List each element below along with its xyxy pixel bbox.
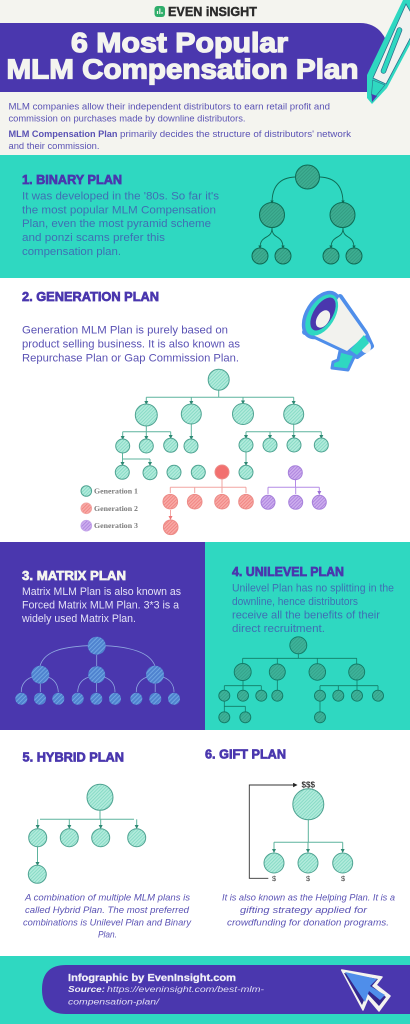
heading: generation plan: 2. GENERATION PLAN <box>22 289 159 304</box>
title: 6 Most Popular <box>71 27 288 58</box>
heading: unilevel plan: 4. UNILEVEL PLAN <box>232 564 344 579</box>
intro text: MLM companies allow their independent distributors to earn retail profit and <box>8 102 330 112</box>
text: hybrid plan description: combinations is Unilevel Plan and Binary <box>23 918 192 928</box>
footer text: compensation-plan/ <box>68 997 161 1007</box>
intro text: primarily decides the structure of distributors' network <box>120 129 352 139</box>
intro text <box>8 102 352 151</box>
text: binary plan description: It was developed in the '80s. So far it's <box>22 190 220 202</box>
panel: hybrid plan <box>22 750 192 940</box>
legend: generations <box>81 486 139 531</box>
text: binary plan description <box>22 190 220 258</box>
text: unilevel plan description: Unilevel Plan has no splitting in the <box>232 583 394 595</box>
panel: gift plan <box>205 747 395 928</box>
text: binary plan description: compensation plan. <box>22 246 121 258</box>
text: binary plan description: and ponzi scams prefer this <box>22 232 166 244</box>
chart: binary tree <box>252 165 362 264</box>
intro text: MLM Compensation Plan <box>8 129 118 139</box>
text: hybrid plan description: Plan. <box>98 930 117 940</box>
chart: gift tree: $ <box>272 874 277 883</box>
chart: gift tree: $ <box>341 874 346 883</box>
footer text: Source: <box>68 984 105 994</box>
title: MLM Compensation Plan <box>6 54 358 84</box>
icon: pencil <box>367 0 410 104</box>
text: binary plan description: Plan, even the most pyramid scheme <box>22 218 211 230</box>
chart: hybrid tree <box>28 784 146 883</box>
panel: binary plan <box>22 165 362 264</box>
footer banner <box>42 965 410 1014</box>
text: gift plan description: It is also known as the Helping Plan. It is a <box>222 893 395 903</box>
chart: generation tree <box>115 369 328 535</box>
chart: gift tree: $$$ <box>302 780 316 790</box>
text: generation plan description: Repurchase Plan or Gap Commission Plan. <box>22 352 239 364</box>
footer text <box>68 973 264 1007</box>
panel: generation plan <box>22 286 371 535</box>
intro text: and their commission. <box>8 141 100 151</box>
title banner <box>0 23 386 92</box>
heading: binary plan: 1. BINARY PLAN <box>22 172 122 187</box>
text: matrix plan description: widely used Matrix Plan. <box>21 613 136 625</box>
text: unilevel plan description: direct recruitment. <box>232 623 325 635</box>
text: gift plan description <box>222 893 395 928</box>
legend: generations: Generation 1 <box>94 488 139 496</box>
footer text: Infographic by EvenInsight.com <box>68 973 236 984</box>
legend: generations: Generation 3 <box>94 522 139 530</box>
text: generation plan description <box>22 325 241 364</box>
chart: matrix tree <box>15 637 180 705</box>
heading: matrix plan: 3. MATRIX PLAN <box>22 568 126 583</box>
text: binary plan description: the most popular MLM Compensation <box>22 204 216 216</box>
legend: generations: Generation 2 <box>94 505 139 513</box>
heading: gift plan: 6. GIFT PLAN <box>205 747 286 762</box>
text: unilevel plan description: downline, hence distributors <box>232 596 358 608</box>
panel: matrix plan <box>15 568 181 705</box>
text: gift plan description: gifting strategy applied for <box>240 905 368 915</box>
panel: unilevel plan <box>219 564 394 723</box>
icon: megaphone <box>296 286 371 370</box>
text: matrix plan description: Forced Matrix MLM Plan. 3*3 is a <box>22 600 180 612</box>
text: matrix plan description <box>21 586 181 625</box>
text: hybrid plan description: called Hybrid Plan. The most preferred <box>25 905 190 915</box>
logo: Even Insight: EVEN iNSIGHT <box>168 5 257 19</box>
text: unilevel plan description <box>232 583 394 635</box>
title <box>6 27 358 84</box>
text: hybrid plan description <box>23 893 192 940</box>
text: generation plan description: product selling business. It is also known as <box>22 338 241 350</box>
chart: gift tree: $ <box>306 874 311 883</box>
chart: gift tree <box>249 780 353 883</box>
text: matrix plan description: Matrix MLM Plan is also known as <box>22 586 181 598</box>
footer text: https://eveninsight.com/best-mlm- <box>107 984 264 994</box>
heading: hybrid plan: 5. HYBRID PLAN <box>22 750 124 765</box>
intro text: commission on purchases made by downline distributors. <box>8 114 245 124</box>
icon: cursor <box>342 970 390 1011</box>
chart: unilevel tree <box>219 637 384 723</box>
text: generation plan description: Generation MLM Plan is purely based on <box>22 325 228 337</box>
text: unilevel plan description: receive all the benefits of their <box>232 610 380 622</box>
text: gift plan description: crowdfunding for donation programs. <box>227 918 389 928</box>
text: hybrid plan description: A combination of multiple MLM plans is <box>24 893 191 903</box>
